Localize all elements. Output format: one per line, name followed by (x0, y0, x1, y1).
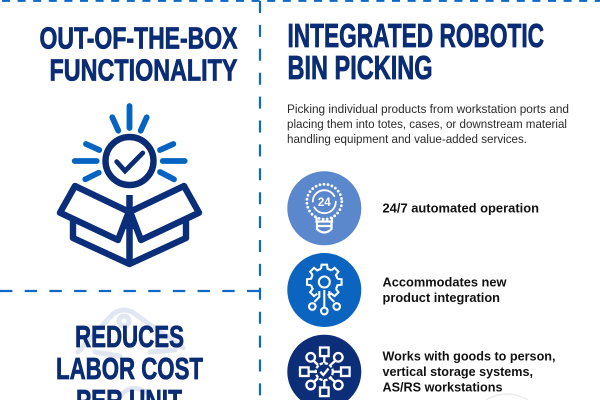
label: compatible systems: AS/RS workstations (382, 381, 502, 395)
label: compatible systems: vertical storage systems, (382, 365, 533, 379)
heading: out-of-the-box functionality: OUT-OF-THE-BOX (40, 20, 238, 56)
label: product integration: Accommodates new (382, 276, 507, 290)
icon: light rays (75, 106, 185, 179)
label: compatible systems (382, 350, 556, 395)
description paragraph: Picking individual products from workstation ports and (287, 102, 569, 116)
heading: reduces labor cost per unit: REDUCES (75, 319, 184, 354)
heading: reduces labor cost per unit: LABOR COST (56, 351, 203, 386)
heading: out-of-the-box functionality: FUNCTIONALITY (50, 52, 238, 88)
watermark: reduces labor cost icon (78, 310, 183, 400)
icon: workflow network (287, 335, 361, 400)
icon: 24/7 light bulb (287, 171, 361, 245)
heading: integrated robotic bin picking (288, 17, 544, 86)
heading: out-of-the-box functionality (40, 20, 238, 88)
description paragraph: placing them into totes, cases, or downstream material (287, 117, 567, 131)
heading: integrated robotic bin picking: BIN PICKING (288, 49, 432, 86)
description paragraph (287, 102, 569, 146)
icon: 24/7 light bulb: 24 (318, 197, 331, 209)
icon: box (60, 186, 199, 264)
icon: open box with check badge (60, 106, 199, 264)
label: product integration (382, 276, 507, 305)
heading: reduces labor cost per unit (56, 319, 203, 400)
label: 24/7 operation: 24/7 automated operation (382, 202, 539, 216)
icon: gear with circuit nodes (287, 253, 361, 327)
description paragraph: handling equipment and value-added services. (287, 132, 527, 146)
label: compatible systems: Works with goods to person, (382, 350, 556, 364)
icon: check badge (106, 137, 154, 185)
watermark: faint arc bottom right (469, 394, 545, 400)
label: product integration: product integration (382, 291, 500, 305)
